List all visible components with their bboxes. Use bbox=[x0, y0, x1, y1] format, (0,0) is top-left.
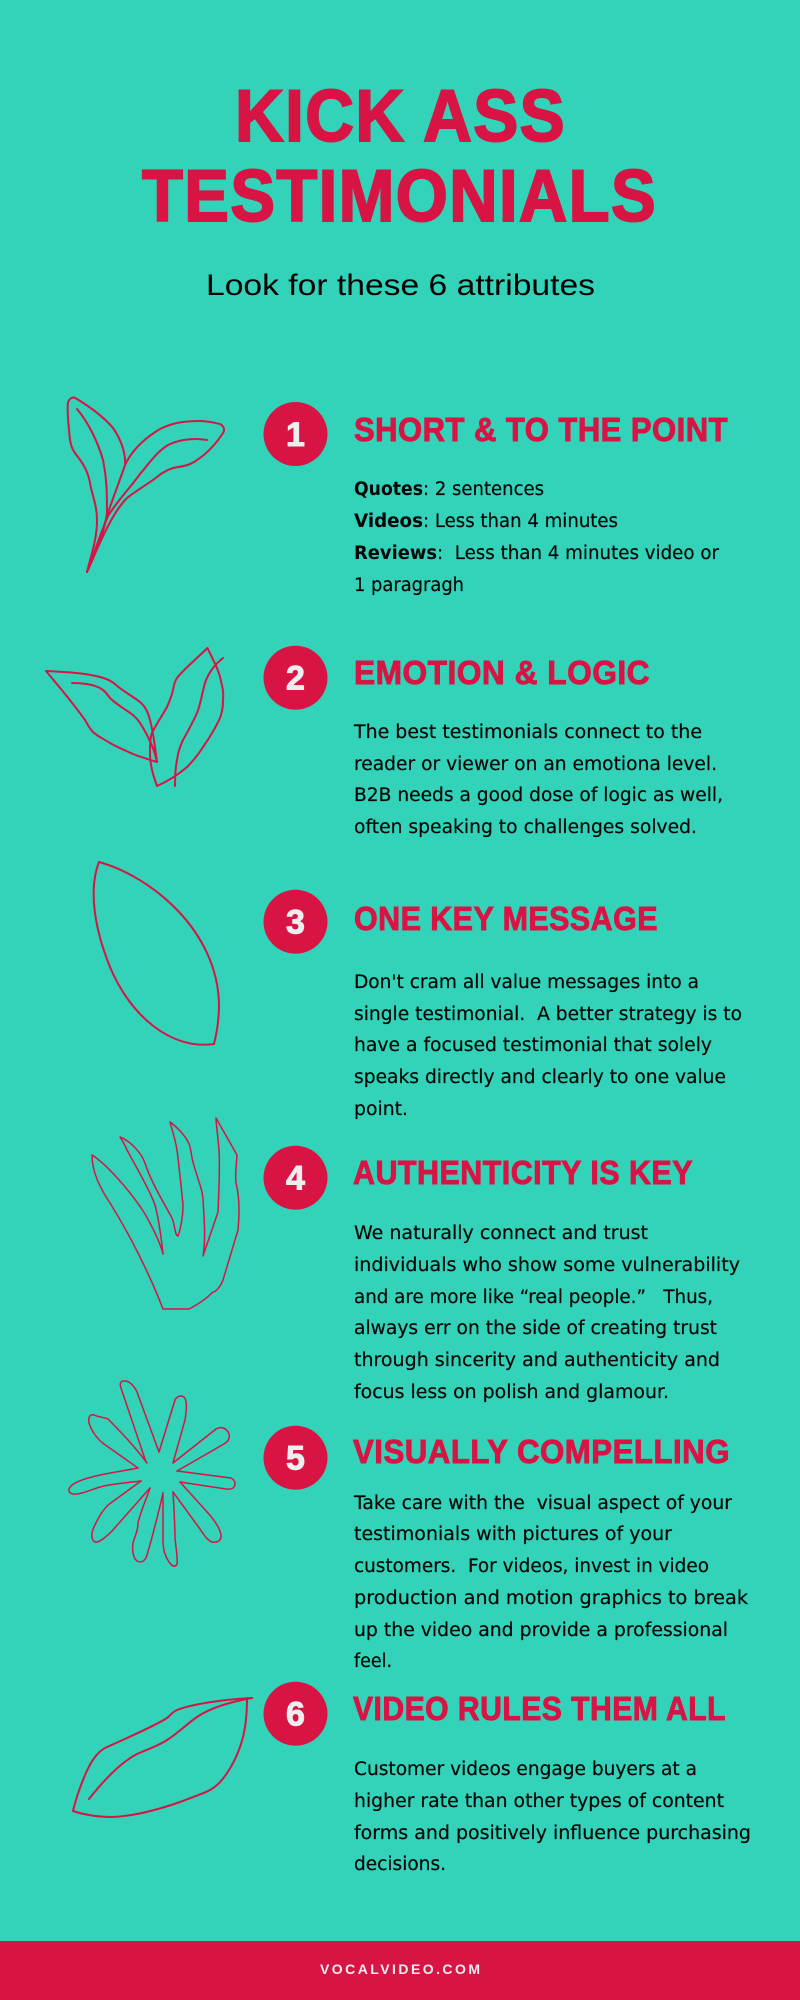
body text 4: We naturally connect and trust bbox=[354, 1223, 648, 1244]
body text 1: Reviews bbox=[354, 543, 437, 564]
body text 6: decisions. bbox=[354, 1854, 446, 1875]
footer bar: VOCALVIDEO.COM bbox=[320, 1961, 480, 1977]
panel: section 5 visually compelling bbox=[69, 1381, 748, 1672]
number badge 6 bbox=[264, 1682, 328, 1746]
body text 6 bbox=[354, 1759, 751, 1875]
body text 5: Take care with the visual aspect of your bbox=[353, 1493, 732, 1514]
body text 1: Videos bbox=[354, 511, 423, 532]
body text 3: have a focused testimonial that solely bbox=[354, 1035, 712, 1056]
body text 5: production and motion graphics to break bbox=[354, 1588, 748, 1609]
footer bar bbox=[0, 1941, 800, 2000]
body text 3: speaks directly and clearly to one value bbox=[354, 1067, 726, 1088]
body text 1: Quotes bbox=[354, 479, 423, 500]
body text 2 bbox=[353, 722, 723, 838]
heading 5: VISUALLY COMPELLING bbox=[353, 1434, 730, 1471]
body text 1 bbox=[354, 479, 719, 596]
body text 1: : Less than 4 minutes video or bbox=[437, 543, 719, 564]
body text 6: forms and positively influence purchasing bbox=[354, 1823, 751, 1844]
icon: frond hand bbox=[92, 1118, 239, 1309]
panel: section 4 authenticity is key bbox=[92, 1118, 740, 1403]
number badge 3 bbox=[264, 890, 328, 954]
body text 5: customers. For videos, invest in video bbox=[354, 1556, 709, 1577]
body text 1: 1 paragragh bbox=[354, 575, 464, 596]
body text 1: : Less than 4 minutes bbox=[423, 511, 618, 532]
body text 2: The best testimonials connect to the bbox=[353, 722, 702, 743]
body text 5: feel. bbox=[354, 1651, 392, 1672]
body text 4: individuals who show some vulnerability bbox=[354, 1255, 740, 1276]
heading 1: SHORT & TO THE POINT bbox=[354, 412, 728, 449]
title: KICK ASS bbox=[235, 74, 566, 157]
panel: section 3 one key message bbox=[94, 862, 742, 1120]
body text 2: often speaking to challenges solved. bbox=[354, 817, 697, 838]
number badge 2 bbox=[264, 646, 328, 710]
icon: ten petal flower bbox=[69, 1381, 235, 1566]
body text 3: point. bbox=[354, 1099, 408, 1120]
body text 3: single testimonial. A better strategy is to bbox=[354, 1004, 742, 1025]
icon: crossed leaves bbox=[46, 648, 223, 786]
body text 5: up the video and provide a professional bbox=[354, 1620, 728, 1641]
panel: section 6 video rules them all bbox=[73, 1682, 751, 1875]
panel: section 2 emotion and logic bbox=[46, 646, 723, 838]
title bbox=[142, 74, 657, 237]
number badge 1 bbox=[264, 402, 328, 466]
heading 2: EMOTION & LOGIC bbox=[354, 655, 650, 692]
heading 6: VIDEO RULES THEM ALL bbox=[353, 1691, 726, 1728]
body text 3 bbox=[354, 972, 742, 1120]
subtitle: Look for these 6 attributes bbox=[206, 269, 595, 302]
body text 3: Don't cram all value messages into a bbox=[354, 972, 699, 993]
body text 4: and are more like “real people.” Thus, bbox=[354, 1287, 713, 1308]
number badge 5: 5 bbox=[286, 1440, 305, 1478]
body text 4 bbox=[354, 1223, 740, 1403]
body text 5: testimonials with pictures of your bbox=[354, 1524, 672, 1545]
body text 6: higher rate than other types of content bbox=[354, 1791, 724, 1812]
body text 4: always err on the side of creating trust bbox=[354, 1318, 717, 1339]
body text 2: reader or viewer on an emotiona level. bbox=[354, 754, 717, 775]
body text 4: focus less on polish and glamour. bbox=[354, 1382, 669, 1403]
number badge 4 bbox=[264, 1146, 328, 1210]
icon: wide leaf bbox=[73, 1698, 252, 1817]
title: TESTIMONIALS bbox=[142, 154, 657, 237]
body text 2: B2B needs a good dose of logic as well, bbox=[354, 785, 723, 806]
number badge 5 bbox=[264, 1426, 328, 1490]
number badge 6: 6 bbox=[286, 1696, 305, 1734]
body text 4: through sincerity and authenticity and bbox=[354, 1350, 720, 1371]
heading 4: AUTHENTICITY IS KEY bbox=[353, 1155, 693, 1192]
number badge 4: 4 bbox=[286, 1160, 305, 1198]
icon: single leaf bbox=[94, 862, 219, 1045]
icon: two leaves sprig bbox=[68, 398, 224, 572]
number badge 1: 1 bbox=[286, 416, 305, 454]
body text 5 bbox=[353, 1493, 748, 1672]
body text 1: : 2 sentences bbox=[423, 479, 544, 500]
number badge 2: 2 bbox=[286, 660, 305, 698]
number badge 3: 3 bbox=[286, 904, 305, 942]
panel: section 1 short and to the point bbox=[68, 398, 728, 596]
heading 3: ONE KEY MESSAGE bbox=[354, 901, 658, 938]
body text 6: Customer videos engage buyers at a bbox=[354, 1759, 697, 1780]
